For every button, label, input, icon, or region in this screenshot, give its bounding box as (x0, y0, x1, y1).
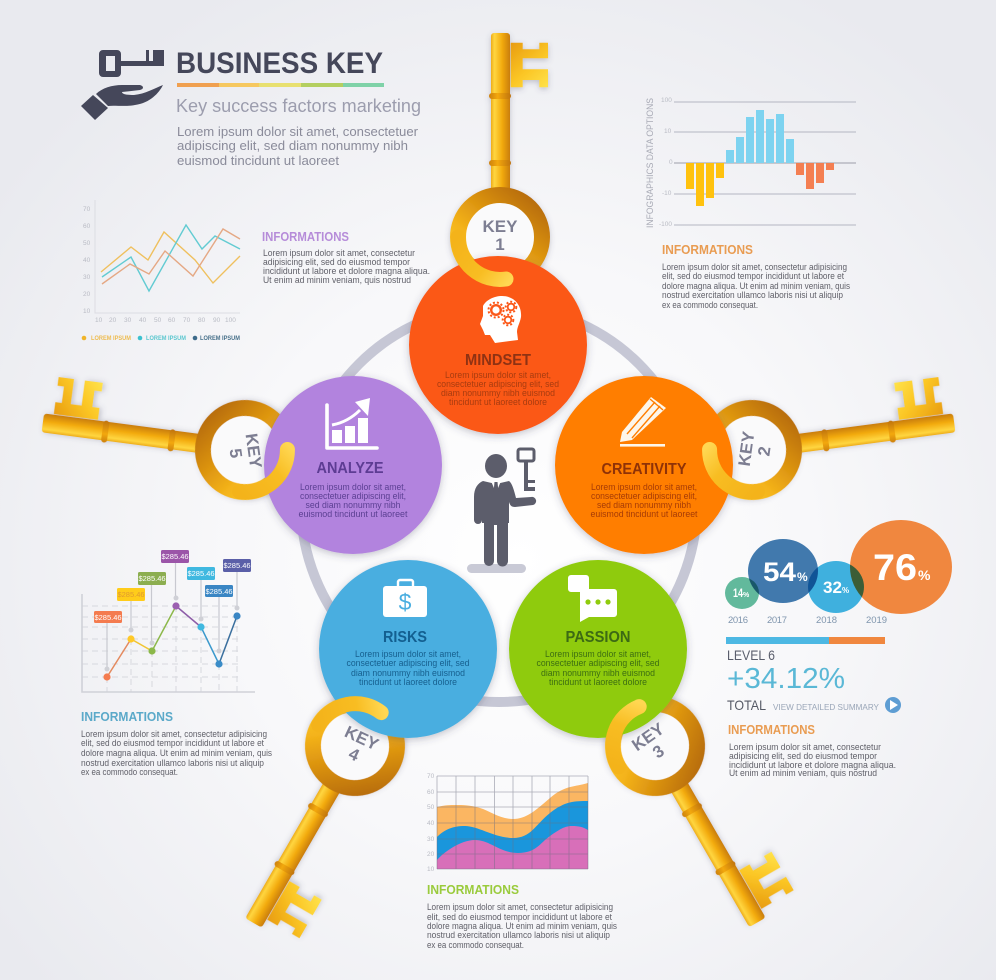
info block: purple: adipisicing elit, sed do eiusmod tempor (263, 257, 410, 267)
level stat: TOTAL (727, 697, 766, 713)
icon: hand holding key (81, 50, 164, 120)
line chart: 10 (83, 308, 91, 315)
info block: blue: INFORMATIONS (81, 709, 173, 724)
intro text: adipiscing elit, sed diam nonummy nibh (177, 138, 408, 153)
panel: analyze: Lorem ipsum dolor sit amet, (300, 482, 406, 492)
bar chart: 0 (669, 159, 673, 166)
chart legend: LOREM IPSUM (200, 335, 240, 342)
price tags: $285.46 (138, 574, 166, 583)
info block: green: nostrud exercitation ullamco laboris nisi ut aliquip (427, 930, 610, 940)
info block: green (427, 882, 617, 950)
info block: orange right (728, 722, 896, 778)
area chart: 10 (427, 866, 435, 873)
intro text: Lorem ipsum dolor sit amet, consectetuer (177, 124, 419, 139)
panel: creativity (555, 376, 733, 554)
info block: orange right: Ut enim ad minim veniam, quis nostrud (729, 768, 877, 778)
bar chart: INFOGRAPHICS DATA OPTIONS (645, 98, 656, 228)
connecting ring (301, 306, 697, 702)
panel: risks: RISKS (383, 629, 427, 646)
line chart: 40 (83, 257, 91, 264)
level stat: VIEW DETAILED SUMMARY (773, 702, 879, 712)
panel: passion: PASSION (566, 629, 630, 646)
icon: briefcase: $ (399, 589, 412, 615)
panel: passion: tincidunt ut laoreet dolore (549, 677, 647, 687)
area chart (427, 773, 588, 873)
info block: green: INFORMATIONS (427, 882, 519, 897)
price tags (94, 550, 251, 623)
info block: orange top: Lorem ipsum dolor sit amet, consectetur adipisicing (662, 262, 847, 272)
panel: analyze: ANALYZE (316, 460, 384, 477)
line chart: 20 (109, 317, 117, 324)
line chart: 20 (83, 291, 91, 298)
area chart: 50 (427, 804, 435, 811)
line chart: 60 (83, 223, 91, 230)
key labels: KEY (342, 722, 382, 755)
key hooks over the circles (240, 237, 757, 767)
title: BUSINESS KEY (176, 47, 383, 80)
info block: blue: nostrud exercitation ullamco laboris nisi ut aliquip (81, 758, 264, 768)
price tags: $285.46 (94, 613, 122, 622)
info block: blue: elit, sed do eiusmod tempor incididunt ut labore et (81, 738, 264, 748)
key 1 (458, 33, 548, 279)
icon: rising chart (327, 398, 377, 448)
bubble chart: 76 (873, 547, 917, 588)
icon: speech bubbles (568, 575, 617, 622)
level stat: +34.12% (727, 663, 845, 695)
line chart (82, 200, 240, 342)
area chart: 60 (427, 789, 435, 796)
key labels: 5 (226, 447, 246, 459)
key 5 (37, 376, 293, 497)
info block: orange top: nostrud exercitation ullamco laboris nisi ut aliquip (662, 290, 843, 300)
panel: passion: diam nonummy nibh euismod (541, 668, 655, 678)
bubble chart: 2016 (728, 615, 748, 626)
area chart: 20 (427, 851, 435, 858)
info block: purple: INFORMATIONS (262, 229, 349, 244)
bubble chart: % (743, 592, 750, 599)
info block: green: ex ea commodo consequat. (427, 940, 524, 950)
bubble chart: % (797, 570, 808, 584)
panel: risks: tincidunt ut laoreet dolore (359, 677, 457, 687)
line chart: 60 (168, 317, 176, 324)
icon: head with gears (480, 296, 521, 343)
title colour rule (177, 83, 384, 87)
panel: mindset: MINDSET (465, 352, 531, 369)
bubble chart: 2019 (866, 615, 887, 626)
line chart: 50 (83, 240, 91, 247)
panel: creativity: Lorem ipsum dolor sit amet, (591, 482, 697, 492)
icon: briefcase (383, 580, 427, 617)
panel: mindset: consectetuer adipiscing elit, sed (437, 379, 559, 389)
panel: passion (509, 560, 687, 738)
key labels: 3 (649, 741, 668, 762)
panel: analyze: euismod tincidunt ut laoreet (298, 509, 408, 519)
price tags: $285.46 (161, 552, 189, 561)
businessman holding key (467, 449, 536, 573)
info block: green: dolore magna aliqua. Ut enim ad minim veniam, quis (427, 921, 617, 931)
info block: purple: Ut enim ad minim veniam, quis nostrud (263, 275, 411, 285)
bubble chart (725, 520, 952, 626)
area chart: 40 (427, 820, 435, 827)
price tags: $285.46 (117, 590, 145, 599)
info block: orange top (662, 242, 850, 310)
info block: blue: ex ea commodo consequat. (81, 767, 178, 777)
key 3 (598, 686, 799, 944)
panel: analyze: consectetuer adipiscing elit, (300, 491, 406, 501)
info block: blue: dolore magna aliqua. Ut enim ad minim veniam, quis (81, 748, 272, 758)
key labels: KEY (735, 430, 759, 467)
info block: purple: incididunt ut labore et dolore magna aliqua. (263, 266, 430, 276)
key 4 (217, 689, 418, 947)
level stat (727, 647, 901, 713)
intro text: euismod tincidunt ut laoreet (177, 153, 339, 168)
small key (518, 449, 535, 491)
bar chart (645, 97, 856, 228)
info block: orange right: incididunt ut labore et dolore magna aliqua. (729, 760, 896, 770)
panel: analyze (264, 376, 442, 554)
panel: risks: Lorem ipsum dolor sit amet, (355, 649, 461, 659)
line chart: 90 (213, 317, 221, 324)
price tags: $285.46 (223, 561, 251, 570)
info block: purple: Lorem ipsum dolor sit amet, consectetur (263, 248, 415, 258)
line chart: 10 (95, 317, 103, 324)
panel: creativity: sed diam nonummy nibh (597, 500, 691, 510)
panel: creativity: CREATIVITY (602, 461, 687, 478)
info block: orange top: INFORMATIONS (662, 242, 753, 257)
bubble chart: 2017 (767, 615, 787, 626)
chart legend (82, 335, 240, 342)
key 2 (704, 376, 960, 497)
info block: orange top: ex ea commodo consequat. (662, 300, 758, 310)
price tags: $285.46 (205, 587, 233, 596)
key labels: KEY (242, 432, 265, 470)
panel: creativity: euismod tincidunt ut laoreet (590, 509, 698, 519)
info block: orange top: elit, sed do eiusmod tempor incididunt ut labore et (662, 271, 844, 281)
info block: orange right: Lorem ipsum dolor sit amet, consectetur (729, 742, 881, 752)
bubble chart: % (918, 567, 931, 583)
info block: blue (81, 709, 272, 777)
info block: orange right: adipisicing elit, sed do eiusmod tempor (729, 751, 877, 761)
area chart: 70 (427, 773, 435, 780)
key labels: 1 (495, 235, 505, 254)
area chart: 30 (427, 836, 435, 843)
line chart: 70 (183, 317, 191, 324)
point chart with price tags (82, 550, 255, 692)
subtitle: Key success factors marketing (176, 96, 421, 116)
line chart: 30 (83, 274, 91, 281)
panel: mindset: Lorem ipsum dolor sit amet, (445, 370, 551, 380)
panel: mindset: diam nonummy nibh euismod (441, 388, 555, 398)
icon: pencil (620, 397, 666, 447)
line chart: 40 (139, 317, 147, 324)
panel: analyze: sed diam nonummy nibh (306, 500, 400, 510)
panel: passion: consectetuer adipiscing elit, sed (536, 658, 660, 668)
info block: green: Lorem ipsum dolor sit amet, consectetur adipisicing (427, 902, 613, 912)
intro text (177, 124, 419, 168)
bubble chart: % (842, 586, 849, 595)
info block: blue: Lorem ipsum dolor sit amet, consectetur adipisicing (81, 729, 267, 739)
key labels: 4 (346, 744, 363, 765)
panel: risks (319, 560, 497, 738)
panel: creativity: consectetuer adipiscing elit, (591, 491, 697, 501)
bar chart: 100 (661, 97, 672, 104)
line chart: 80 (198, 317, 206, 324)
chart legend: LOREM IPSUM (146, 335, 186, 342)
price tags: $285.46 (187, 569, 215, 578)
bar chart: -10 (662, 190, 672, 197)
info block: orange right: INFORMATIONS (728, 722, 815, 737)
icon: play button (885, 697, 901, 713)
panel: mindset (409, 256, 587, 434)
bubble chart: 54 (763, 557, 796, 587)
panel: risks: consectetuer adipiscing elit, sed (346, 658, 470, 668)
bar chart: -100 (659, 221, 672, 228)
line chart: 100 (225, 317, 236, 324)
key labels: 2 (754, 445, 774, 457)
level progress bar (726, 637, 885, 644)
panel: risks: diam nonummy nibh euismod (351, 668, 465, 678)
info block: green: elit, sed do eiusmod tempor incididunt ut labore et (427, 912, 612, 922)
info block: orange top: dolore magna aliqua. Ut enim ad minim veniam, quis (662, 281, 850, 291)
bubble chart: 14 (733, 586, 743, 600)
level stat: LEVEL 6 (727, 647, 775, 663)
line chart: 30 (124, 317, 132, 324)
bar chart: 10 (664, 128, 672, 135)
info block: purple (262, 229, 430, 285)
panel: passion: Lorem ipsum dolor sit amet, (545, 649, 651, 659)
bubble chart: 32 (823, 578, 842, 597)
chart legend: LOREM IPSUM (91, 335, 131, 342)
bubble chart: 2018 (816, 615, 837, 626)
line chart: 70 (83, 206, 91, 213)
line chart: 50 (154, 317, 162, 324)
panel: mindset: tincidunt ut laoreet dolore (449, 397, 547, 407)
key labels (224, 217, 776, 771)
key labels: KEY (483, 217, 518, 236)
key labels: KEY (628, 719, 668, 755)
